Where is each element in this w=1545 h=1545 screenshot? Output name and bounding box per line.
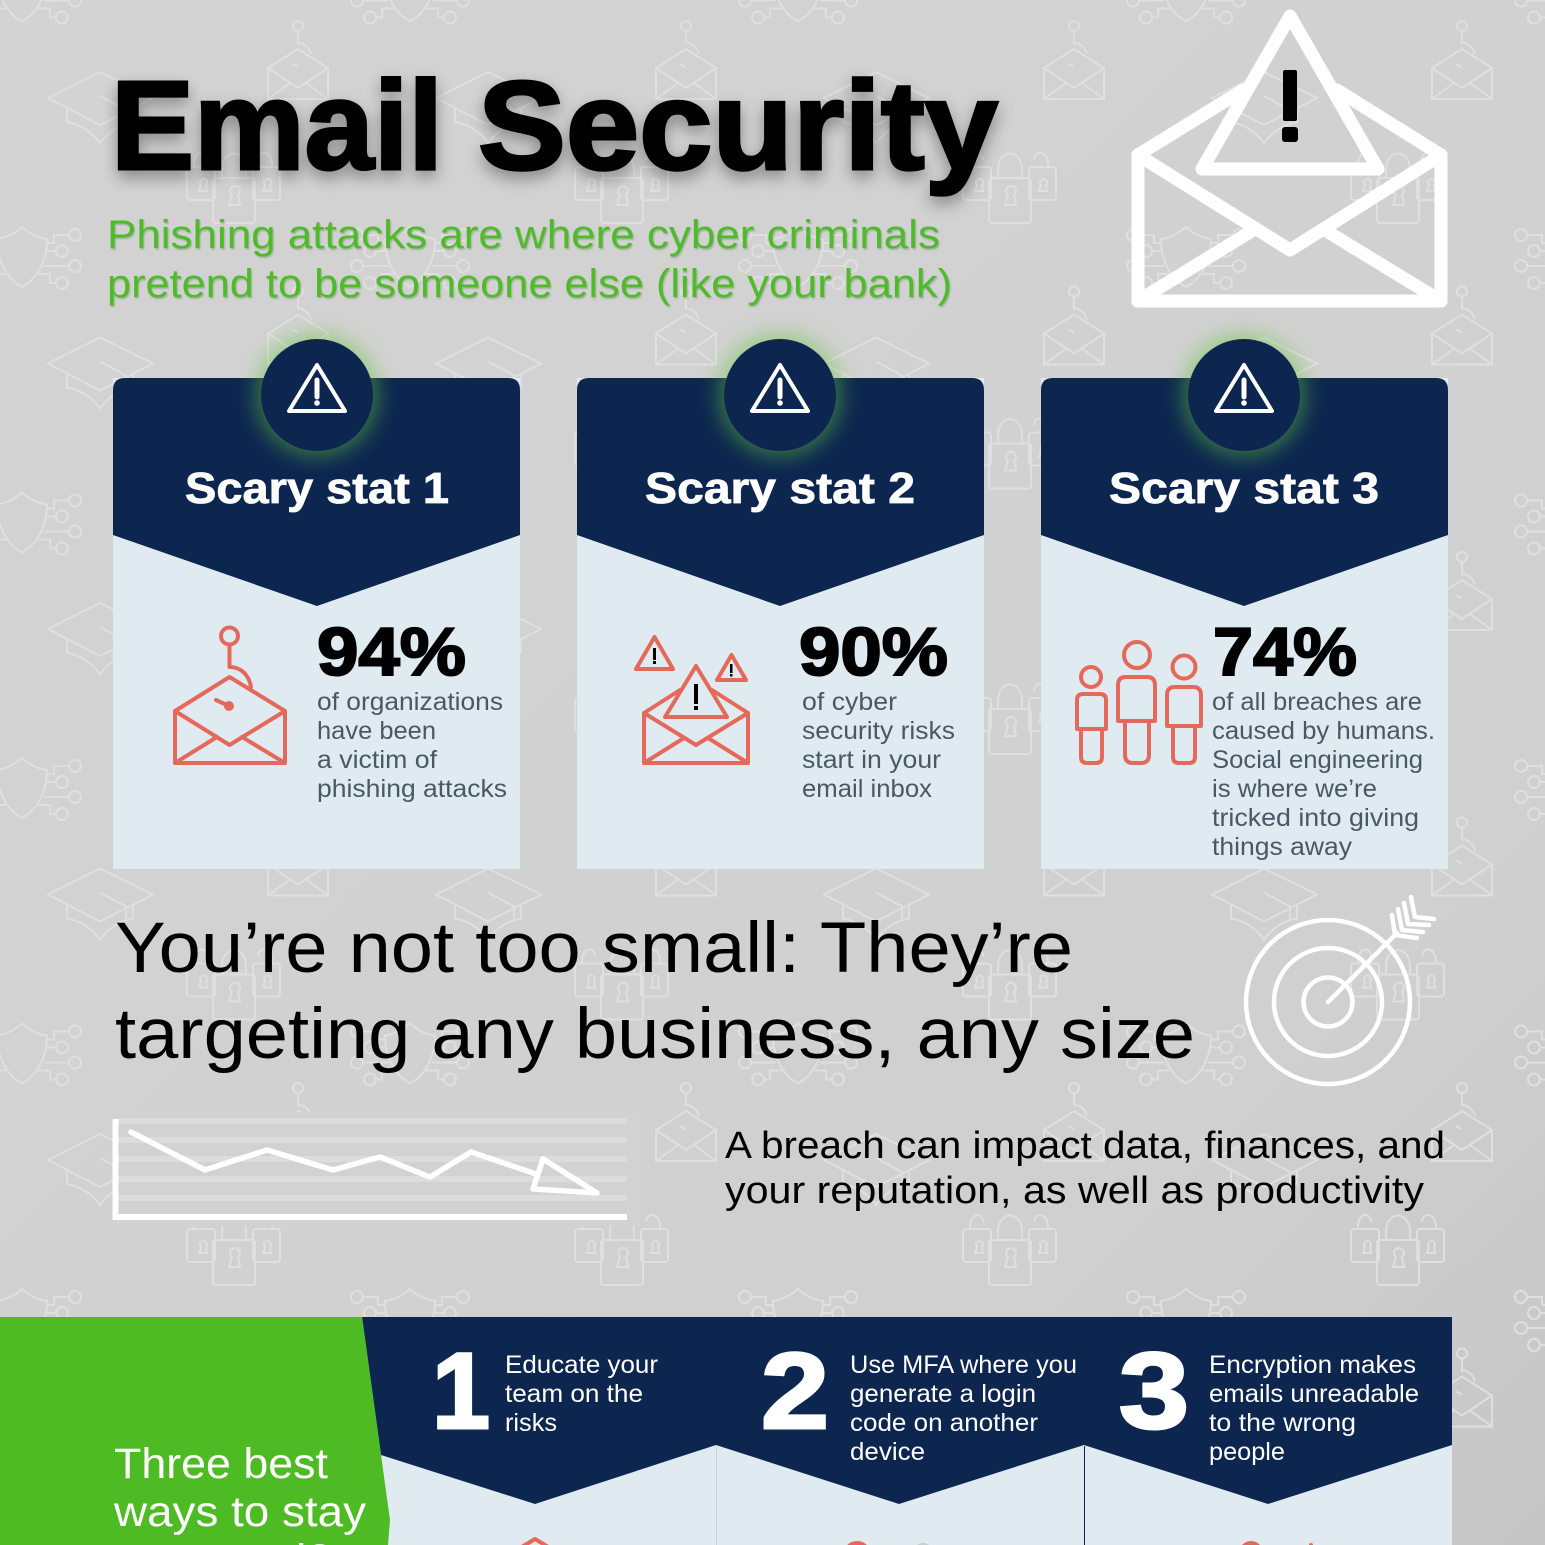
- green side panel: [0, 1317, 390, 1545]
- stat 3 description: caused by humans.: [1212, 717, 1435, 745]
- step 2: Use MFA where you: [850, 1351, 1077, 1379]
- step 1: team on the: [505, 1380, 643, 1408]
- stat 3 description: things away: [1212, 833, 1353, 861]
- panel: scary stat 1: [113, 333, 520, 869]
- subtitle: pretend to be someone else (like your bank): [107, 262, 952, 306]
- panel: three best ways: [0, 1317, 1452, 1545]
- step 2: 2: [761, 1330, 829, 1451]
- panel: scary stat 3: [1041, 333, 1448, 869]
- stat 2 description: security risks: [802, 717, 955, 745]
- step 1: 1: [432, 1330, 490, 1451]
- stat 74%: 74%: [1213, 614, 1357, 690]
- stat 2 description: start in your: [802, 746, 941, 774]
- icon: target with arrow: [1246, 897, 1434, 1084]
- icon: envelope with warnings: [636, 637, 748, 763]
- step 3: 3: [1119, 1330, 1189, 1451]
- stat 1 description: [317, 688, 507, 803]
- title: Security: [478, 55, 998, 196]
- step 1: risks: [505, 1409, 557, 1437]
- icon: phishing hook envelope: [175, 628, 285, 763]
- heading: you're not too small: [115, 909, 1195, 1074]
- subtitle: [107, 213, 952, 306]
- heading: scary stat 1: Scary stat 1: [185, 464, 449, 513]
- chart: declining line: [113, 1112, 640, 1226]
- stat 3 description: [1212, 688, 1435, 861]
- stat 3 description: of all breaches are: [1212, 688, 1422, 716]
- icon: people: [1077, 642, 1201, 763]
- green side panel: Three best: [114, 1440, 328, 1488]
- heading: scary stat 2: Scary stat 2: [645, 464, 915, 513]
- stat 1 description: of organizations: [317, 688, 503, 716]
- stat 90%: 90%: [799, 614, 948, 690]
- stat 94%: 94%: [317, 614, 466, 690]
- step 2: [761, 1330, 1077, 1466]
- icon: warning triangle 3: [1216, 365, 1272, 411]
- title: [111, 55, 998, 196]
- step 1: Educate your: [505, 1351, 658, 1379]
- heading: scary stat 3: Scary stat 3: [1109, 464, 1379, 513]
- icon: warning triangle 1: [289, 365, 345, 411]
- stat 2 description: [802, 688, 955, 803]
- icon: warning triangle 2: [752, 365, 808, 411]
- step 3: [1119, 1330, 1419, 1466]
- step 2: generate a login: [850, 1380, 1036, 1408]
- stat 2 description: email inbox: [802, 775, 933, 803]
- stat 1 description: phishing attacks: [317, 775, 507, 803]
- stat 3 description: is where we’re: [1212, 775, 1377, 803]
- step 3: emails unreadable: [1209, 1380, 1419, 1408]
- icon: large envelope with warning triangle: [1138, 16, 1441, 301]
- stat 3 description: Social engineering: [1212, 746, 1423, 774]
- heading: you're not too small: You’re not too small: They’re: [115, 909, 1073, 988]
- panel: scary stat 2: [577, 333, 984, 869]
- title: Email: [111, 55, 443, 196]
- heading: you're not too small: targeting any business, any size: [115, 995, 1195, 1074]
- stat 3 description: tricked into giving: [1212, 804, 1419, 832]
- text: breach impact: A breach can impact data, finances, and: [725, 1125, 1445, 1167]
- stat 1 description: a victim of: [317, 746, 437, 774]
- text: breach impact: your reputation, as well as productivity: [725, 1170, 1424, 1212]
- step 3: people: [1209, 1438, 1285, 1466]
- step 3: Encryption makes: [1209, 1351, 1416, 1379]
- icon tops cropped at the bottom edge: [520, 1539, 1311, 1545]
- step 3: to the wrong: [1209, 1409, 1356, 1437]
- text: breach impact: [725, 1125, 1445, 1212]
- green side panel: ways to stay: [113, 1488, 367, 1536]
- step 1: [432, 1330, 658, 1451]
- stat 1 description: have been: [317, 717, 436, 745]
- stat 2 description: of cyber: [802, 688, 897, 716]
- step 2: code on another: [850, 1409, 1038, 1437]
- subtitle: Phishing attacks are where cyber criminals: [107, 213, 940, 257]
- step 2: device: [850, 1438, 925, 1466]
